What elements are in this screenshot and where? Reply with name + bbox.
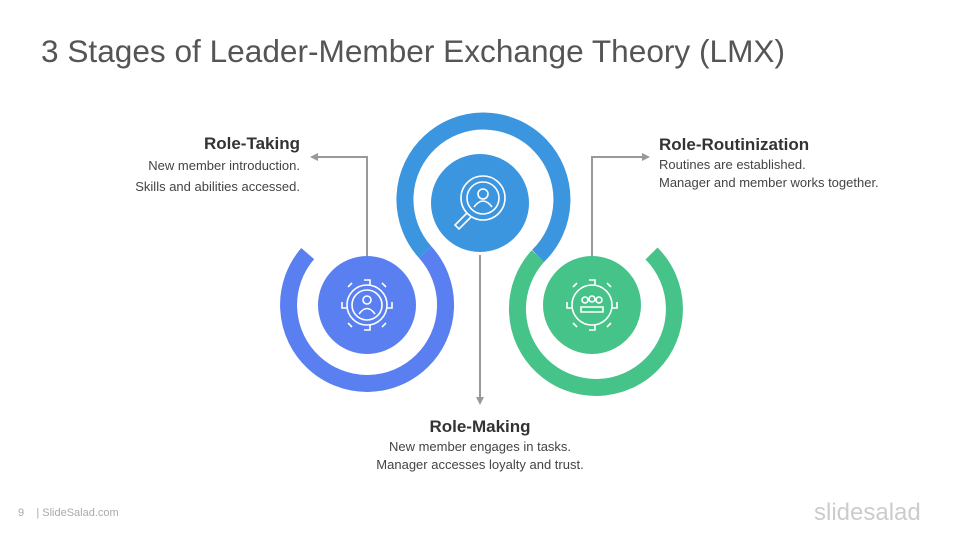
text: Role-Making: Role-Making [429, 417, 531, 436]
footer: 9 | SlideSalad.com [18, 507, 119, 519]
text: Role-Routinization: Manager and member works together. [659, 175, 879, 190]
arrow: to Role-Making [476, 255, 484, 405]
logo: slidesalad [814, 499, 921, 526]
text: Role-Taking: Role-Taking [204, 134, 300, 153]
text: Role-Making: New member engages in tasks. [389, 439, 571, 454]
title: 3 Stages of Leader-Member Exchange Theory (LMX) [41, 33, 785, 69]
icon: left gear person [318, 256, 416, 354]
ring: left [289, 252, 446, 383]
text: Role-Taking [135, 134, 300, 194]
icon: center magnifier person [431, 154, 529, 252]
text: Role-Making [376, 417, 584, 472]
arrow: to Role-Routinization [592, 153, 650, 256]
arrow: to Role-Taking [310, 153, 367, 256]
text: Role-Routinization [659, 135, 879, 190]
text: Role-Routinization: Routines are established. [659, 157, 806, 172]
ring: center [405, 121, 562, 256]
text: Role-Routinization: Role-Routinization [659, 135, 809, 154]
ring: right [517, 254, 674, 387]
text: Role-Making: Manager accesses loyalty and trust. [376, 457, 584, 472]
icon: right gear team [543, 256, 641, 354]
text: Role-Taking: New member introduction. [148, 158, 300, 173]
text: Role-Taking: Skills and abilities accessed. [135, 179, 300, 194]
